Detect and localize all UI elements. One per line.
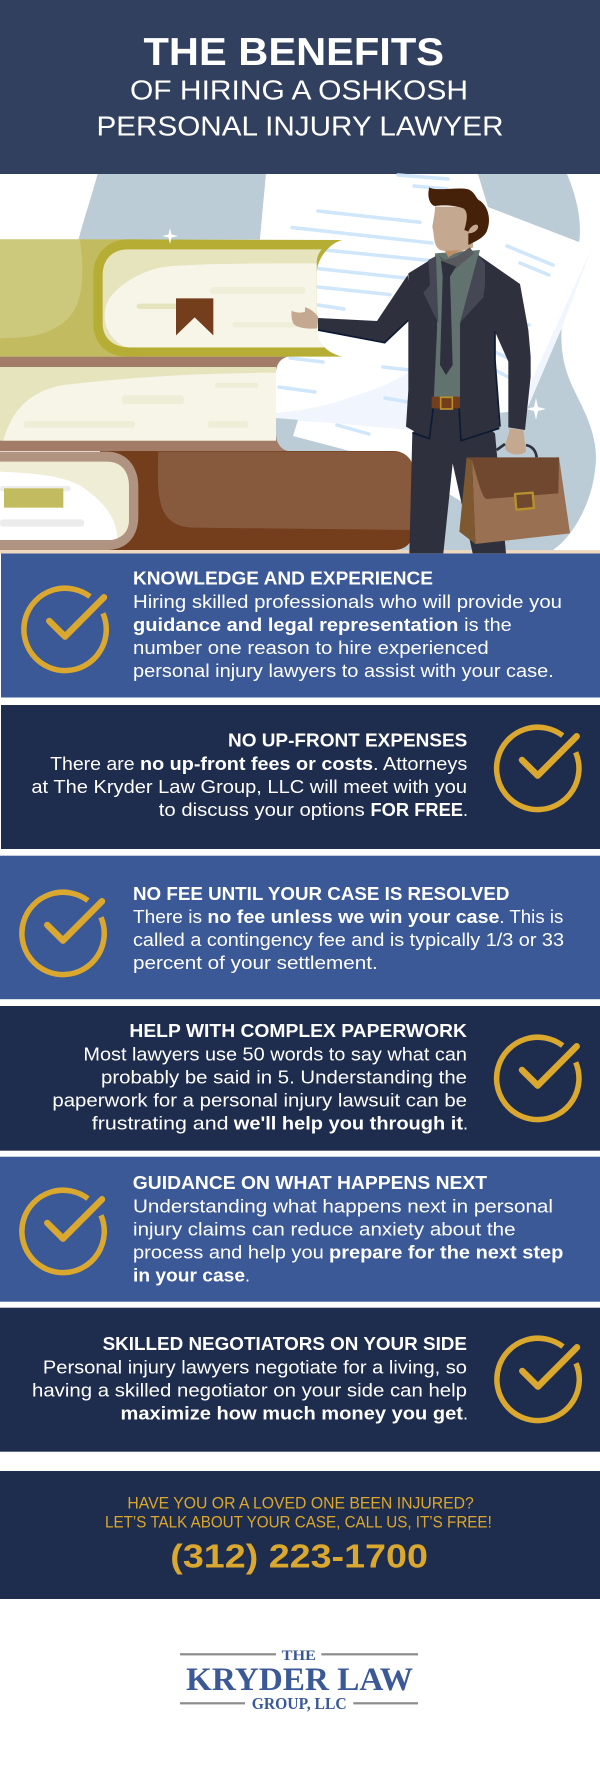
panel: help with complex paperwork	[0, 1006, 600, 1151]
body text: .	[463, 1403, 468, 1423]
body text	[52, 1044, 468, 1133]
icon: check circle	[22, 1190, 104, 1273]
body text: to discuss your options	[159, 800, 365, 820]
body text	[133, 1196, 563, 1285]
book: top olive	[0, 239, 342, 357]
body text: . This is	[499, 907, 563, 927]
body text: is the	[464, 615, 512, 635]
header banner	[0, 0, 600, 174]
body text: .	[463, 800, 468, 820]
icon: bookmark	[176, 298, 213, 335]
body text: maximize how much money you get	[120, 1403, 463, 1423]
body text: .	[245, 1265, 250, 1285]
phone number: (312) 223-1700	[170, 1537, 428, 1574]
heading: GUIDANCE ON WHAT HAPPENS NEXT	[133, 1173, 487, 1193]
panel: no fee until your case is resolved	[0, 856, 600, 999]
body text: frustrating and	[92, 1113, 228, 1133]
body text: Understanding what happens next in personal	[133, 1196, 553, 1216]
body text	[31, 754, 468, 820]
body text: prepare for the next step	[329, 1242, 563, 1262]
book: middle cream	[0, 357, 288, 451]
body text: process and help you	[133, 1242, 324, 1262]
body text: having a skilled negotiator on your side can help	[32, 1380, 467, 1400]
heading: KNOWLEDGE AND EXPERIENCE	[133, 569, 433, 589]
body text: at The Kryder Law Group, LLC will meet with you	[31, 777, 467, 797]
belt	[432, 397, 460, 409]
paper sheets	[260, 174, 592, 502]
callout text: HAVE YOU OR A LOVED ONE BEEN INJURED?	[127, 1495, 474, 1513]
body text: called a contingency fee and is typically 1/3 or 33	[133, 930, 564, 950]
body text	[133, 592, 562, 681]
logo: The Kryder Law Group, LLC	[180, 1648, 418, 1713]
body text: in your case	[133, 1265, 245, 1285]
icon: check circle	[22, 892, 104, 975]
icon: check circle	[24, 588, 106, 671]
body text: no up-front fees or costs	[140, 754, 373, 774]
body text: Most lawyers use 50 words to say what can	[83, 1044, 467, 1064]
body text: There are	[50, 754, 135, 774]
body text: .	[463, 1113, 468, 1133]
title: PERSONAL INJURY LAWYER	[96, 110, 504, 142]
body text: FOR FREE	[370, 800, 463, 820]
lawyer figure	[318, 187, 570, 553]
necktie	[440, 261, 456, 375]
callout text: LET’S TALK ABOUT YOUR CASE, CALL US, IT’S FREE!	[105, 1514, 492, 1532]
floor strip	[0, 550, 600, 554]
right hand	[505, 428, 526, 455]
briefcase	[459, 444, 570, 544]
body text: . Attorneys	[373, 754, 467, 774]
panel: knowledge and experience	[1, 554, 600, 698]
body text: There is	[133, 907, 202, 927]
body text: paperwork for a personal injury lawsuit can be	[52, 1090, 467, 1110]
heading: HELP WITH COMPLEX PAPERWORK	[129, 1021, 467, 1041]
body text: guidance and legal representation	[133, 615, 458, 635]
logo: The Kryder Law Group, LLC: KRYDER LAW	[186, 1662, 413, 1698]
body text	[32, 1357, 468, 1423]
body text: Hiring skilled professionals who will provide you	[133, 592, 562, 612]
heading: SKILLED NEGOTIATORS ON YOUR SIDE	[103, 1334, 467, 1354]
trousers	[409, 403, 506, 553]
left hand	[291, 307, 318, 329]
stack of books	[0, 239, 413, 550]
icon: check circle	[497, 1037, 579, 1120]
panel: guidance on what happens next	[0, 1157, 600, 1302]
title: OF HIRING A OSHKOSH	[130, 74, 468, 106]
book: bottom brown	[0, 451, 413, 550]
heading: NO UP-FRONT EXPENSES	[228, 731, 467, 751]
body text: injury claims can reduce anxiety about the	[133, 1219, 516, 1239]
icon: check circle	[497, 1338, 579, 1421]
body text: percent of your settlement.	[133, 953, 378, 973]
panel: call to action	[0, 1471, 600, 1599]
head and neck	[428, 187, 489, 269]
logo: The Kryder Law Group, LLC: GROUP, LLC	[252, 1694, 347, 1713]
body text: no fee unless we win your case	[207, 907, 499, 927]
callout text	[105, 1495, 492, 1532]
panel: no up-front expenses	[1, 705, 600, 849]
title: THE BENEFITS	[144, 31, 444, 74]
icon: sparkles	[162, 228, 546, 420]
body text: we'll help you through it	[233, 1113, 463, 1133]
body text: probably be said in 5. Understanding the	[101, 1067, 467, 1087]
background shapes	[78, 174, 596, 550]
title	[96, 31, 504, 142]
body text: personal injury lawyers to assist with your case.	[133, 661, 554, 681]
suit jacket	[318, 255, 531, 441]
icon: check circle	[497, 727, 579, 810]
illustration: lawyer beside stack of books	[0, 174, 600, 554]
panel: skilled negotiators on your side	[0, 1308, 600, 1452]
heading: NO FEE UNTIL YOUR CASE IS RESOLVED	[133, 884, 509, 904]
shirt	[432, 250, 480, 400]
body text	[133, 907, 564, 973]
logo: The Kryder Law Group, LLC: THE	[282, 1648, 316, 1664]
body text: number one reason to hire experienced	[133, 638, 489, 658]
body text: Personal injury lawyers negotiate for a living, so	[43, 1357, 467, 1377]
